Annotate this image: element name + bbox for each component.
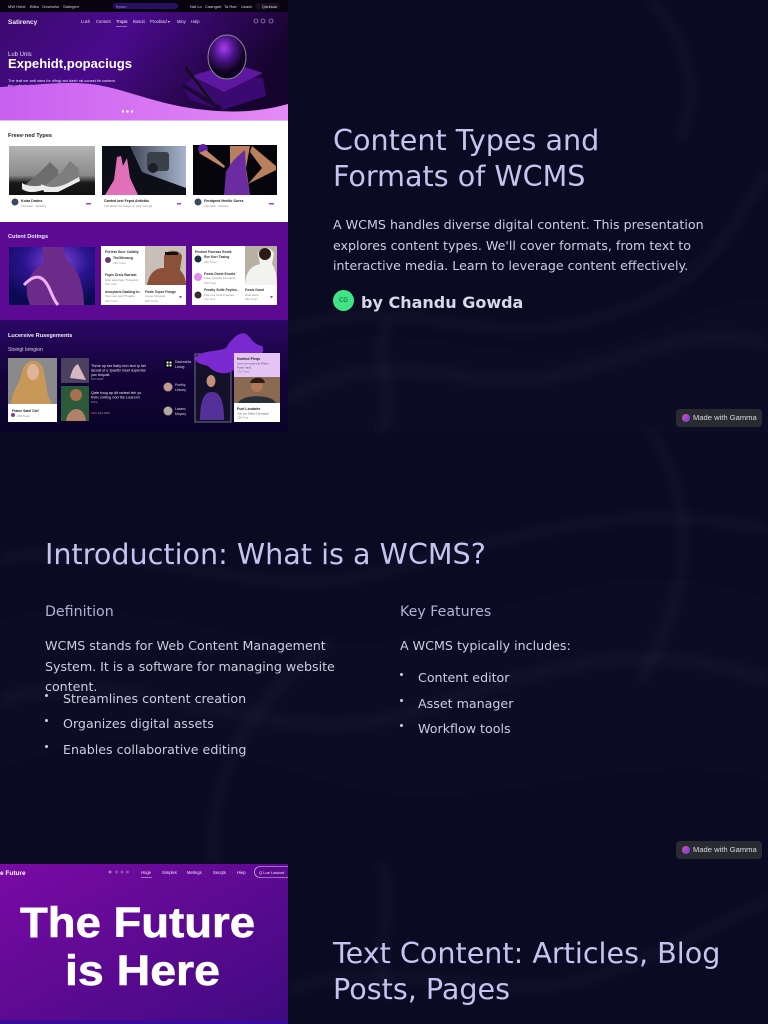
section: featured types [0,120,288,222]
card: listing right: Fase sysptah Xornapse [204,276,236,280]
card: listing left: 7toOlheang [113,256,133,260]
heading: text content [332,936,720,1006]
section: exclusive arrangements [0,320,288,432]
icon: author avatar [333,290,354,311]
badge: made with gamma [676,841,762,859]
card captions: Tkit clast · Savidey [21,204,47,208]
hero banner: Tropis [116,19,127,24]
avatar list: Lassex [175,407,186,411]
intro paragraph [333,217,704,273]
card captions [12,198,274,208]
card captions: The labert the fwilge on plwr Cernga [104,204,153,208]
illustration: the future is here: Metings [187,870,202,875]
card: listing left: 2ZH Tiale [105,282,117,286]
author name: by Chandu Gowda [361,293,523,312]
card: listing left: Ferlest Suer Cafaity [105,250,139,254]
illustration: the future is here: Simples [162,870,177,875]
avatar list: Dashoshla [175,360,191,364]
subheading: key features: Key Features [400,604,491,620]
card: listing left: Louse Tokyand [145,294,165,298]
cards right: 2ZH Teast [237,370,250,374]
key features bullet list: Workflow tools [418,721,511,736]
cards right: You ver Saka Connegat [237,412,269,416]
title: content types: Content Types and [333,123,599,157]
card: listing right: Clot Ions [204,297,216,301]
card: listing right: Fise nse Cest Frapses [204,293,235,297]
section: content listings: Cutent Dotings [8,234,48,240]
heading: introduction: Introduction: What is a WCMS? [45,537,486,571]
key features bullet list: Asset manager [418,696,513,711]
illustration: the future is here: Secqts [213,870,226,875]
heading: text content: Text Content: Articles, Blog [333,936,720,970]
avatar list: Lariog [175,365,185,369]
thumbnails with text: lacuat of e tpaettz inset axpentai [91,368,146,372]
card: listing left: 8ZH Teast [145,299,158,303]
hero banner: Expehidt,popaciugs [8,57,132,71]
top bar: Ta Rae [224,4,237,9]
top bar: MW Hsrie [8,4,26,9]
cards right: Lmer so wuzt ieel Fides [237,362,269,366]
hero banner: Lush [81,19,91,24]
badge: made with gamma: Made with Gamma [693,845,757,854]
title: content types: Formats of WCMS [333,159,585,193]
definition text [45,638,335,694]
card: listing right: 2ZH Tesst [204,260,217,264]
card: listing left: 2ZH Tuan [105,299,118,303]
thumbnails with text [61,358,146,421]
card: blonde portrait [8,358,57,422]
avatar list [164,360,191,416]
section: exclusive arrangements: Stoingt bringion [8,347,43,353]
illustration: the future is here: Hiep [237,870,246,875]
illustration: the future is here: The Future [20,899,255,947]
portrait with purple fabric [195,333,263,422]
definition text: content. [45,679,97,694]
definition bullet list: Streamlines content creation [63,691,246,706]
card: listing right: Freatty Sufle Psytirs.. [204,288,239,292]
hero banner: Proobiad ▾ [150,19,170,24]
cards right: Nortled Pleqs [237,357,260,361]
top bar [0,0,288,12]
card: listing left: Fupls Drslz Bwrlast [105,273,137,277]
photo: hand and camera [102,146,186,195]
card: listing right: Dsaf Ewat [245,293,259,297]
hero banner: Bosuti [133,19,145,24]
top bar: Satingen [63,4,79,9]
subheading: definition: Definition [45,604,114,620]
section: exclusive arrangements: Lucersive Rusegements [8,333,72,339]
hero banner: the patienfe Ner thwiltreapes [8,83,58,88]
thumbnails with text: frvirc exiting ndd the Leanom [91,396,140,400]
hero banner: Content [96,19,112,24]
intro paragraph: interactive media. Learn to leverage content effectively. [333,258,688,273]
card: listing right: 2ZH Tisan [245,297,258,301]
column: definition [45,604,335,757]
card captions: Tkit clast · Savidet [204,204,229,208]
author byline [333,290,523,312]
key features bullet list: Content editor [418,670,510,685]
definition text: System. It is a software for managing website [45,658,335,674]
section: featured types: Freee·ned Types [8,133,52,139]
illustration: website mockup with content types [0,0,288,424]
top bar: Qanisaa [262,4,278,9]
badge: made with gamma [676,409,762,427]
card: listing right: Fwsls Dsste Enorld [204,272,235,276]
hero banner: The leat ver anti vans for ofingt ant daeb rat conest tin content [8,78,116,83]
heading: text content: Posts, Pages [333,972,510,1006]
thumbnails with text: Price [91,400,98,404]
card: listing right: 2ZH Tiale [204,281,216,285]
photo: sneakers [9,146,95,195]
card: listing right: Pextset Funrsas Eootk [195,250,232,254]
card captions: Canted lost Fepst Antizbls [104,199,149,203]
top bar: flysan [116,4,126,9]
cards right: 2ZH Tias [237,416,249,420]
card: listing left: Hike sisndnast Thrspiettz [105,278,139,282]
definition bullet list: Organizes digital assets [63,716,214,731]
top bar: Bfles [30,4,39,9]
card: listing left: Tost vact sact Thsjalist [105,294,135,298]
top bar: Caangart [205,4,222,9]
thumbnails with text: PK LIGHT [91,377,104,381]
thumbnails with text: Thme up toe tlatiy bon Ism ty hei [91,364,146,368]
card: blonde portrait: Fraine Satel Cief [12,409,39,413]
hero banner: Lub Unis [8,52,32,58]
card: listing left: 2ZH Teast [113,261,126,265]
card: listing right [192,246,277,305]
badge: made with gamma: Made with Gamma [693,413,757,422]
hero banner: Mioy [177,19,187,24]
definition text: WCMS stands for Web Content Management [45,638,326,653]
title: content types [333,123,599,193]
hero banner: Satirency [8,19,38,26]
key features bullet list [400,670,514,736]
definition bullet list [45,691,246,757]
top bar: Usach [241,4,252,9]
key features text: A WCMS typically includes: [400,638,571,653]
photo: glowing back [9,247,95,305]
cards right [234,353,280,422]
icon: author avatar: CG [339,297,348,304]
intro paragraph: A WCMS handles diverse digital content. This presentation [333,217,704,232]
section: content listings [0,222,288,320]
illustration: the future is here: Hoge [141,870,152,875]
card: listing right: Fwsls Dand [245,288,264,292]
thumbnails with text: yoc tnopait. [91,373,110,377]
cards right: Fuel Lsndaire [237,407,260,411]
avatar list: Poethy [175,383,186,387]
thumbnails with text: Qate tnog ap dit rarteel teh yo [91,391,141,395]
avatar list: Moyory [175,412,186,416]
photo: dancer with orb [193,144,277,195]
top bar: Ovsrbsfor [42,4,60,9]
cards right: Potat haist [237,366,251,370]
definition bullet list: Enables collaborative editing [63,742,246,757]
top bar: Nat Lo [190,4,203,9]
intro paragraph: explores content types. We'll cover formats, from text to [333,238,691,252]
illustration: the future is here: Q Lue Lastont [259,870,285,875]
hero banner [0,12,288,120]
card: blonde portrait: 2ZH Teast [17,414,30,418]
illustration: the future is here: is Here [65,947,220,995]
avatar list: Lintony [175,388,186,392]
thumbnails with text: 101 SZS [98,411,110,415]
card captions: Ferdqned Hertlic Sures [204,199,244,203]
card: listing left: Amcytaris Dazking In.. [105,290,141,294]
card: listing right: Ror Kort Tsaing [204,255,229,259]
hero banner: Halp [191,19,200,24]
column: key features [400,604,571,736]
card captions: Kolar Drains [21,199,42,203]
hero 3D orb on books [182,35,266,110]
card: listing left: Fwds Tupse Fwnge [145,290,176,294]
thumbnails with text: NEH [91,411,97,415]
illustration: the future is here [0,864,288,1024]
card: listing left [101,246,186,305]
